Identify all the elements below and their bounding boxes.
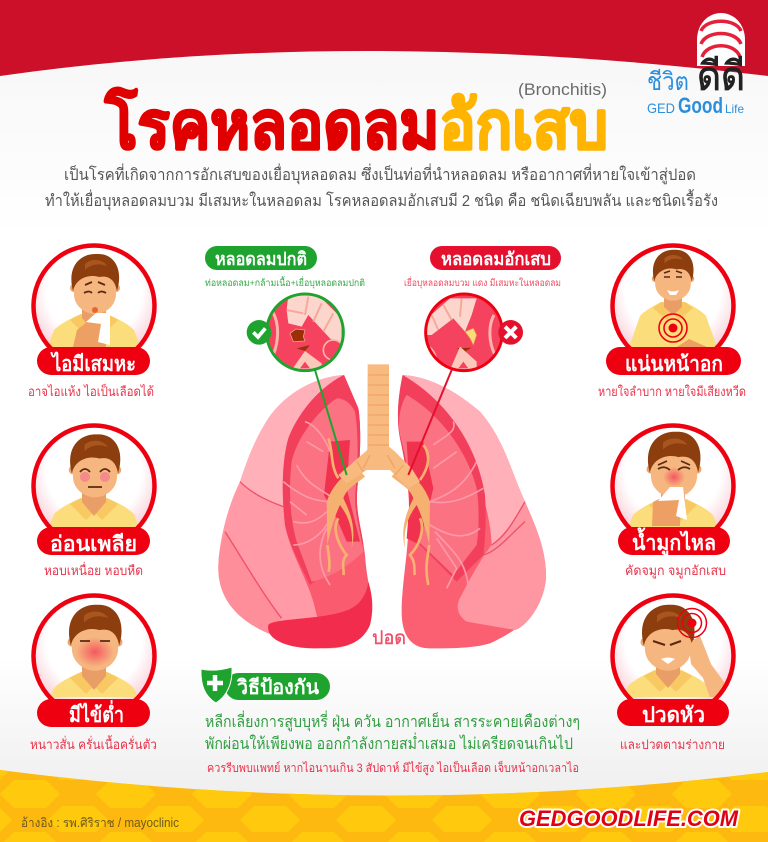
icon: shield plus <box>201 667 232 703</box>
red top banner <box>0 0 768 76</box>
source credit: อ้างอิง : รพ.ศิริราช / mayoclinic <box>21 816 179 830</box>
icon: man with chest target <box>610 243 736 347</box>
inflamed airway heading <box>430 246 561 270</box>
symptom name: น้ำมูกไหล <box>632 527 716 557</box>
symptom: cough with phlegm <box>28 246 154 399</box>
label pill <box>618 527 730 555</box>
inflamed airway note: เยื่อบุหลอดลมบวม แดง มีเสมหะในหลอดลม <box>404 276 561 289</box>
pointer line to inflamed airway <box>408 370 452 475</box>
icon: man blowing nose <box>612 426 734 546</box>
label pill <box>606 347 741 375</box>
trachea and bronchi <box>338 364 420 488</box>
label pill <box>37 699 150 727</box>
logo GED: GED <box>647 100 675 116</box>
pill <box>225 673 330 700</box>
normal airway heading <box>205 246 317 270</box>
symptom note: อาจไอแห้ง ไอเป็นเลือดได้ <box>28 382 154 399</box>
prevention heading <box>201 667 330 703</box>
title: โรคหลอดลมอักเสบ <box>104 86 608 162</box>
icon: man coughing <box>34 246 154 366</box>
right lung <box>392 375 546 648</box>
inflamed airway magnifier <box>423 294 523 372</box>
logo Life: Life <box>725 102 744 116</box>
cross badge <box>498 320 523 345</box>
symptom name: แน่นหน้าอก <box>625 352 723 376</box>
label: วิธีป้องกัน <box>236 676 319 699</box>
website: GEDGOODLIFE.COM <box>519 806 739 831</box>
yellow honeycomb footer band <box>0 770 768 842</box>
English subtitle: (Bronchitis) <box>518 81 607 99</box>
label: หลอดลมอักเสบ <box>441 249 551 269</box>
doctor warning: ควรรีบพบแพทย์ หากไอนานเกิน 3 สัปดาห์ มีไข้สูง ไอเป็นเลือด เจ็บหน้าอกเวลาไอ <box>207 760 579 776</box>
symptom note: หนาวสั่น ครั่นเนื้อครั่นตัว <box>30 735 157 752</box>
symptom name: ไอมีเสมหะ <box>50 351 136 376</box>
intro line 1: เป็นโรคที่เกิดจากการอักเสบของเยื่อบุหลอดลม ซึ่งเป็นท่อที่นำหลอดลม หรืออากาศที่หายใจเข้าสู่ปอด <box>64 163 696 185</box>
logo Thai word life: ชีวิต <box>647 68 689 96</box>
logo Thai word good: ดีดี <box>697 55 745 99</box>
label pill <box>37 347 150 375</box>
symptom: headache <box>612 596 734 752</box>
prevention line 2: พักผ่อนให้เพียงพอ ออกกำลังกายสม่ำเสมอ ไม่เครียดจนเกินไป <box>205 732 573 753</box>
logo <box>647 13 745 118</box>
lungs caption: ปอด <box>372 628 406 649</box>
icon: tired man <box>34 426 154 546</box>
symptom: low fever <box>30 596 157 752</box>
normal airway note: ท่อหลอดลม+กล้ามเนื้อ+เยื่อบุหลอดลมปกติ <box>205 276 365 289</box>
pointer line to normal airway <box>315 370 347 475</box>
symptom note: และปวดตามร่างกาย <box>620 737 725 752</box>
symptom: chest tightness <box>598 246 746 399</box>
label pill <box>617 699 729 726</box>
pill <box>205 246 317 270</box>
intro line 2: ทำให้เยื่อบุหลอดลมบวม มีเสมหะในหลอดลม โรคหลอดลมอักเสบมี 2 ชนิด คือ ชนิดเฉียบพลัน และชนิดเรื้อรัง <box>45 189 718 211</box>
symptom note: หอบเหนื่อย หอบหืด <box>44 562 143 578</box>
symptom: runny nose <box>612 426 734 579</box>
symptom name: มีไข้ต่ำ <box>69 699 124 727</box>
symptom name: อ่อนเพลีย <box>50 532 137 556</box>
symptom note: คัดจมูก จมูกอักเสบ <box>625 563 726 579</box>
lungs illustration <box>218 364 546 648</box>
symptom: fatigue <box>34 426 154 578</box>
icon: feverish man <box>34 596 154 716</box>
prevention line 1: หลีกเลี่ยงการสูบบุหรี่ ฝุ่น ควัน อากาศเย็น สารระคายเคืองต่างๆ <box>205 710 580 732</box>
label pill <box>37 527 150 555</box>
logo arch mark <box>697 13 745 66</box>
left lung <box>218 375 372 648</box>
logo Good: Good <box>678 93 723 118</box>
check badge <box>247 320 271 345</box>
icon: man with headache <box>612 596 734 716</box>
symptom name: ปวดหัว <box>642 704 705 727</box>
normal airway magnifier <box>247 294 343 372</box>
label: หลอดลมปกติ <box>215 249 307 269</box>
pill <box>430 246 561 270</box>
